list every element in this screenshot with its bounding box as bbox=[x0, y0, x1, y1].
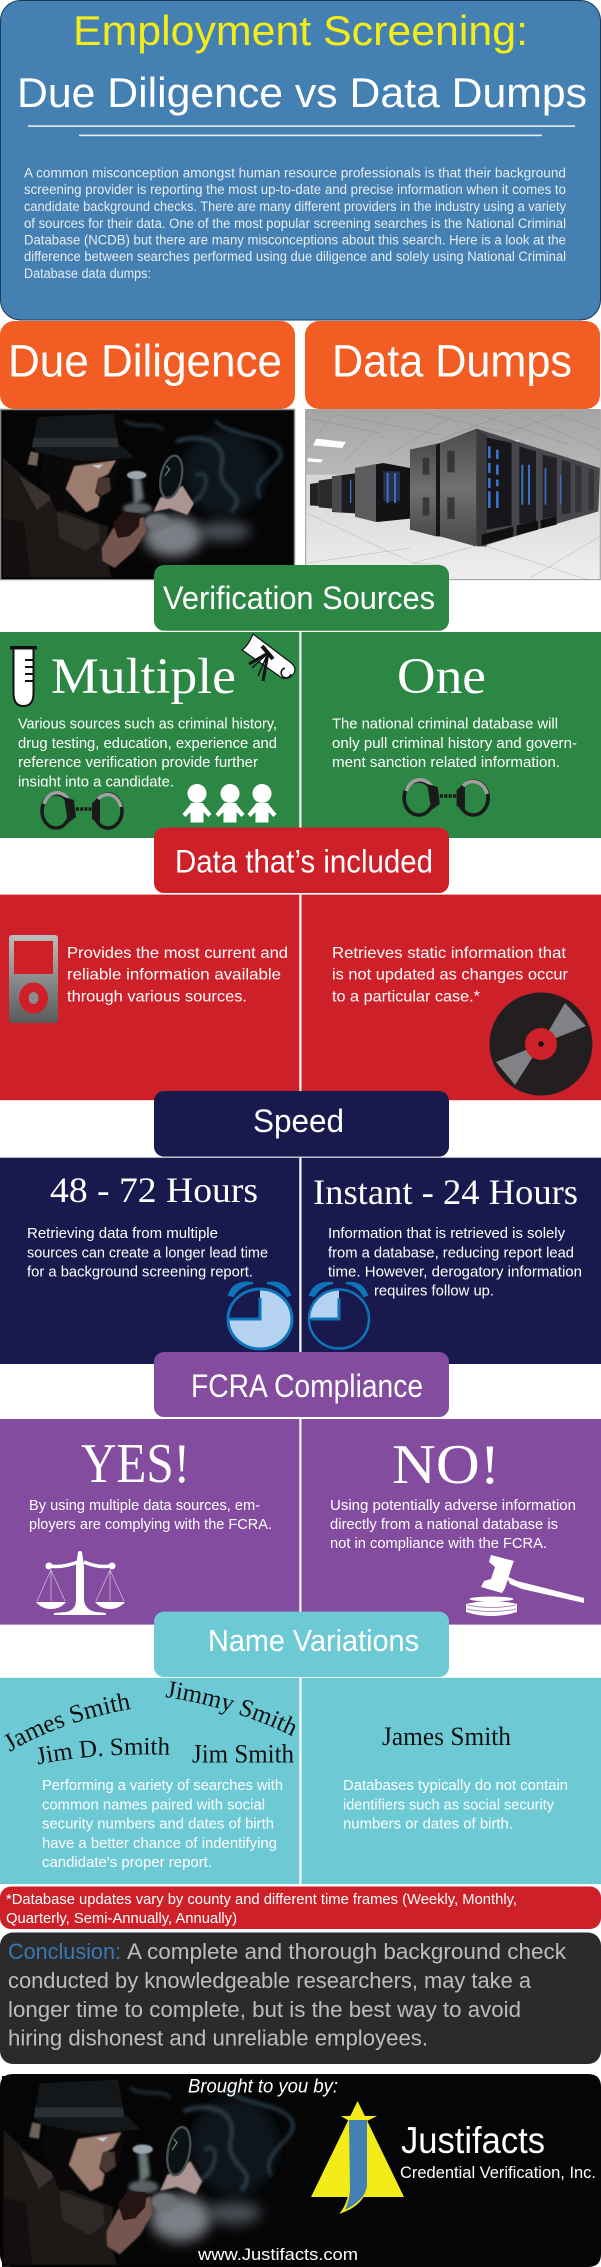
heading: data dumps: Data Dumps bbox=[332, 336, 572, 387]
name: jim d smith curved: Jim D. Smith bbox=[38, 1737, 170, 1764]
text: data right: is not updated as changes occur bbox=[332, 967, 569, 984]
text: verification left: Various sources such as criminal history, bbox=[18, 717, 277, 733]
logo: justifacts mark bbox=[311, 2101, 404, 2214]
text: names right: identifiers such as social security bbox=[343, 1796, 554, 1813]
intro paragraph: Database (NCDB) but there are many misconceptions about this search. Here is a look at the bbox=[24, 232, 566, 248]
panel: header bbox=[0, 0, 600, 320]
text: fcra left: ployers are complying with the FCRA. bbox=[29, 1517, 272, 1533]
footnote: Quarterly, Semi-Annually, Annually) bbox=[6, 1911, 237, 1927]
text: website: www.Justifacts.com bbox=[197, 2245, 358, 2264]
text: yes: YES! bbox=[81, 1433, 190, 1495]
name: james smith right: James Smith bbox=[382, 1722, 511, 1751]
footnote bbox=[0, 1886, 601, 1929]
heading: name variations bbox=[154, 1612, 449, 1677]
text: brought to you by: Brought to you by: bbox=[188, 2076, 338, 2097]
icon: handcuffs right bbox=[404, 780, 488, 815]
text: fcra right bbox=[330, 1498, 576, 1552]
text: speed right bbox=[328, 1226, 582, 1300]
conclusion: longer time to complete, but is the best way to avoid bbox=[8, 1997, 521, 2022]
icon: scales bbox=[36, 1551, 125, 1615]
text: speed left bbox=[27, 1226, 268, 1280]
heading: due diligence bbox=[0, 321, 295, 409]
heading: speed: Speed bbox=[253, 1103, 344, 1139]
text: one: One bbox=[397, 649, 486, 705]
conclusion: hiring dishonest and unreliable employees. bbox=[8, 2026, 428, 2051]
text: names left: Performing a variety of searches with bbox=[42, 1777, 283, 1794]
heading: due diligence: Due Diligence bbox=[8, 336, 282, 387]
heading: verification sources: Verification Sources bbox=[163, 580, 435, 616]
footnote: *Database updates vary by county and different time frames (Weekly, Monthly, bbox=[6, 1892, 517, 1908]
heading: fcra compliance bbox=[154, 1352, 449, 1417]
icon: clock one quarter bbox=[309, 1283, 369, 1348]
name: james smith curved: James Smith bbox=[4, 1693, 131, 1752]
text: 48 - 72 hours: 48 - 72 Hours bbox=[50, 1170, 258, 1210]
name: jimmy smith curved: Jimmy Smith bbox=[166, 1681, 296, 1736]
conclusion: Conclusion: bbox=[8, 1939, 121, 1964]
text: verification right bbox=[332, 717, 577, 771]
text: data left: Provides the most current and bbox=[67, 945, 288, 962]
text: speed right: requires follow up. bbox=[374, 1284, 494, 1300]
intro paragraph: Database data dumps: bbox=[24, 266, 151, 281]
text: verification left: insight into a candidate. bbox=[18, 774, 174, 790]
text: fcra right: not in compliance with the FCRA. bbox=[330, 1536, 547, 1552]
text: speed right: from a database, reducing report lead bbox=[328, 1246, 574, 1262]
text: no: NO! bbox=[392, 1434, 500, 1496]
heading: data included: Data that’s included bbox=[175, 844, 433, 880]
text: names left: candidate's proper report. bbox=[42, 1854, 212, 1871]
photo: detective footer bbox=[2, 2076, 305, 2267]
photo: detective bbox=[0, 410, 294, 580]
heading: data included bbox=[154, 828, 449, 893]
icon: gavel bbox=[466, 1555, 584, 1616]
name: jim smith: Jim Smith bbox=[192, 1740, 294, 1769]
intro paragraph bbox=[24, 166, 566, 281]
text: verification right: ment sanction related information. bbox=[332, 755, 560, 771]
icon: people bbox=[182, 784, 276, 822]
icon: test tube bbox=[10, 646, 37, 706]
intro paragraph: difference between searches performed using due diligence and solely using National Criminal bbox=[24, 249, 566, 264]
text: verification left: drug testing, education, experience and bbox=[18, 736, 277, 752]
panel: name variations bbox=[0, 1678, 601, 1884]
text: verification left: reference verification provide further bbox=[18, 755, 258, 771]
text: names left bbox=[42, 1777, 283, 1871]
text: data left bbox=[67, 945, 288, 1005]
intro paragraph: of sources for their data. One of the most popular screening searches is the National Criminal bbox=[24, 216, 566, 231]
text: fcra left: By using multiple data sources, em- bbox=[29, 1498, 260, 1514]
text: speed left: sources can create a longer lead time bbox=[27, 1246, 268, 1262]
text: fcra left bbox=[29, 1498, 272, 1533]
title line 1: Employment Screening: bbox=[73, 7, 528, 54]
text: names right: numbers or dates of birth. bbox=[343, 1815, 513, 1832]
heading: speed bbox=[154, 1091, 449, 1157]
text: names left: have a better chance of indentifying bbox=[42, 1835, 277, 1852]
icon: handcuffs left bbox=[42, 793, 122, 828]
title line 2: Due Diligence vs Data Dumps bbox=[17, 69, 587, 116]
text: fcra right: directly from a national database is bbox=[330, 1517, 558, 1533]
text: names right: Databases typically do not contain bbox=[343, 1777, 568, 1794]
text: credential verification: Credential Verification, Inc. bbox=[400, 2163, 596, 2182]
text: data left: through various sources. bbox=[67, 988, 247, 1005]
text: data right: Retrieves static information that bbox=[332, 945, 567, 962]
icon: diploma bbox=[242, 634, 295, 681]
intro paragraph: A common misconception amongst human resource professionals is that their background bbox=[24, 166, 566, 181]
footer panel bbox=[0, 2074, 601, 2267]
intro paragraph: screening provider is reporting the most up-to-date and precise information when it comes to bbox=[24, 182, 566, 197]
text: data right: to a particular case.* bbox=[332, 988, 480, 1005]
icon: vinyl record bbox=[490, 992, 592, 1096]
heading: fcra compliance: FCRA Compliance bbox=[191, 1368, 423, 1404]
text: names left: common names paired with social bbox=[42, 1796, 265, 1813]
text: names left: security numbers and dates of birth bbox=[42, 1815, 274, 1832]
panel: fcra compliance bbox=[0, 1419, 601, 1625]
text: names right bbox=[343, 1777, 568, 1832]
icon: music player bbox=[9, 935, 58, 1023]
text: fcra right: Using potentially adverse information bbox=[330, 1498, 576, 1514]
intro paragraph: candidate background checks. There are many different providers in the industry using a variety bbox=[24, 199, 566, 214]
heading: data dumps bbox=[305, 321, 600, 409]
panel: verification sources bbox=[0, 632, 601, 838]
text: verification left bbox=[18, 717, 277, 790]
heading: name variations: Name Variations bbox=[208, 1623, 419, 1658]
text: speed left: for a background screening report. bbox=[27, 1264, 253, 1280]
text: speed right: Information that is retrieved is solely bbox=[328, 1226, 566, 1242]
conclusion: A complete and thorough background check bbox=[127, 1939, 567, 1964]
conclusion bbox=[0, 1932, 601, 2064]
icon: clock three quarters bbox=[228, 1282, 292, 1349]
text: verification right: only pull criminal history and govern- bbox=[332, 736, 577, 752]
heading: verification sources bbox=[154, 565, 449, 631]
panel: data included bbox=[0, 895, 601, 1100]
photo: server room bbox=[306, 410, 600, 580]
text: data left: reliable information available bbox=[67, 967, 281, 984]
text: verification right: The national criminal database will bbox=[332, 717, 558, 733]
panel: speed bbox=[0, 1158, 601, 1364]
text: speed left: Retrieving data from multiple bbox=[27, 1226, 218, 1242]
text: instant - 24 hours: Instant - 24 Hours bbox=[313, 1172, 578, 1212]
text: multiple: Multiple bbox=[51, 649, 236, 705]
text: speed right: time. However, derogatory information bbox=[328, 1264, 582, 1280]
conclusion: conducted by knowledgeable researchers, may take a bbox=[8, 1968, 532, 1993]
text: justifacts: Justifacts bbox=[401, 2120, 545, 2161]
text: data right bbox=[332, 945, 569, 1005]
